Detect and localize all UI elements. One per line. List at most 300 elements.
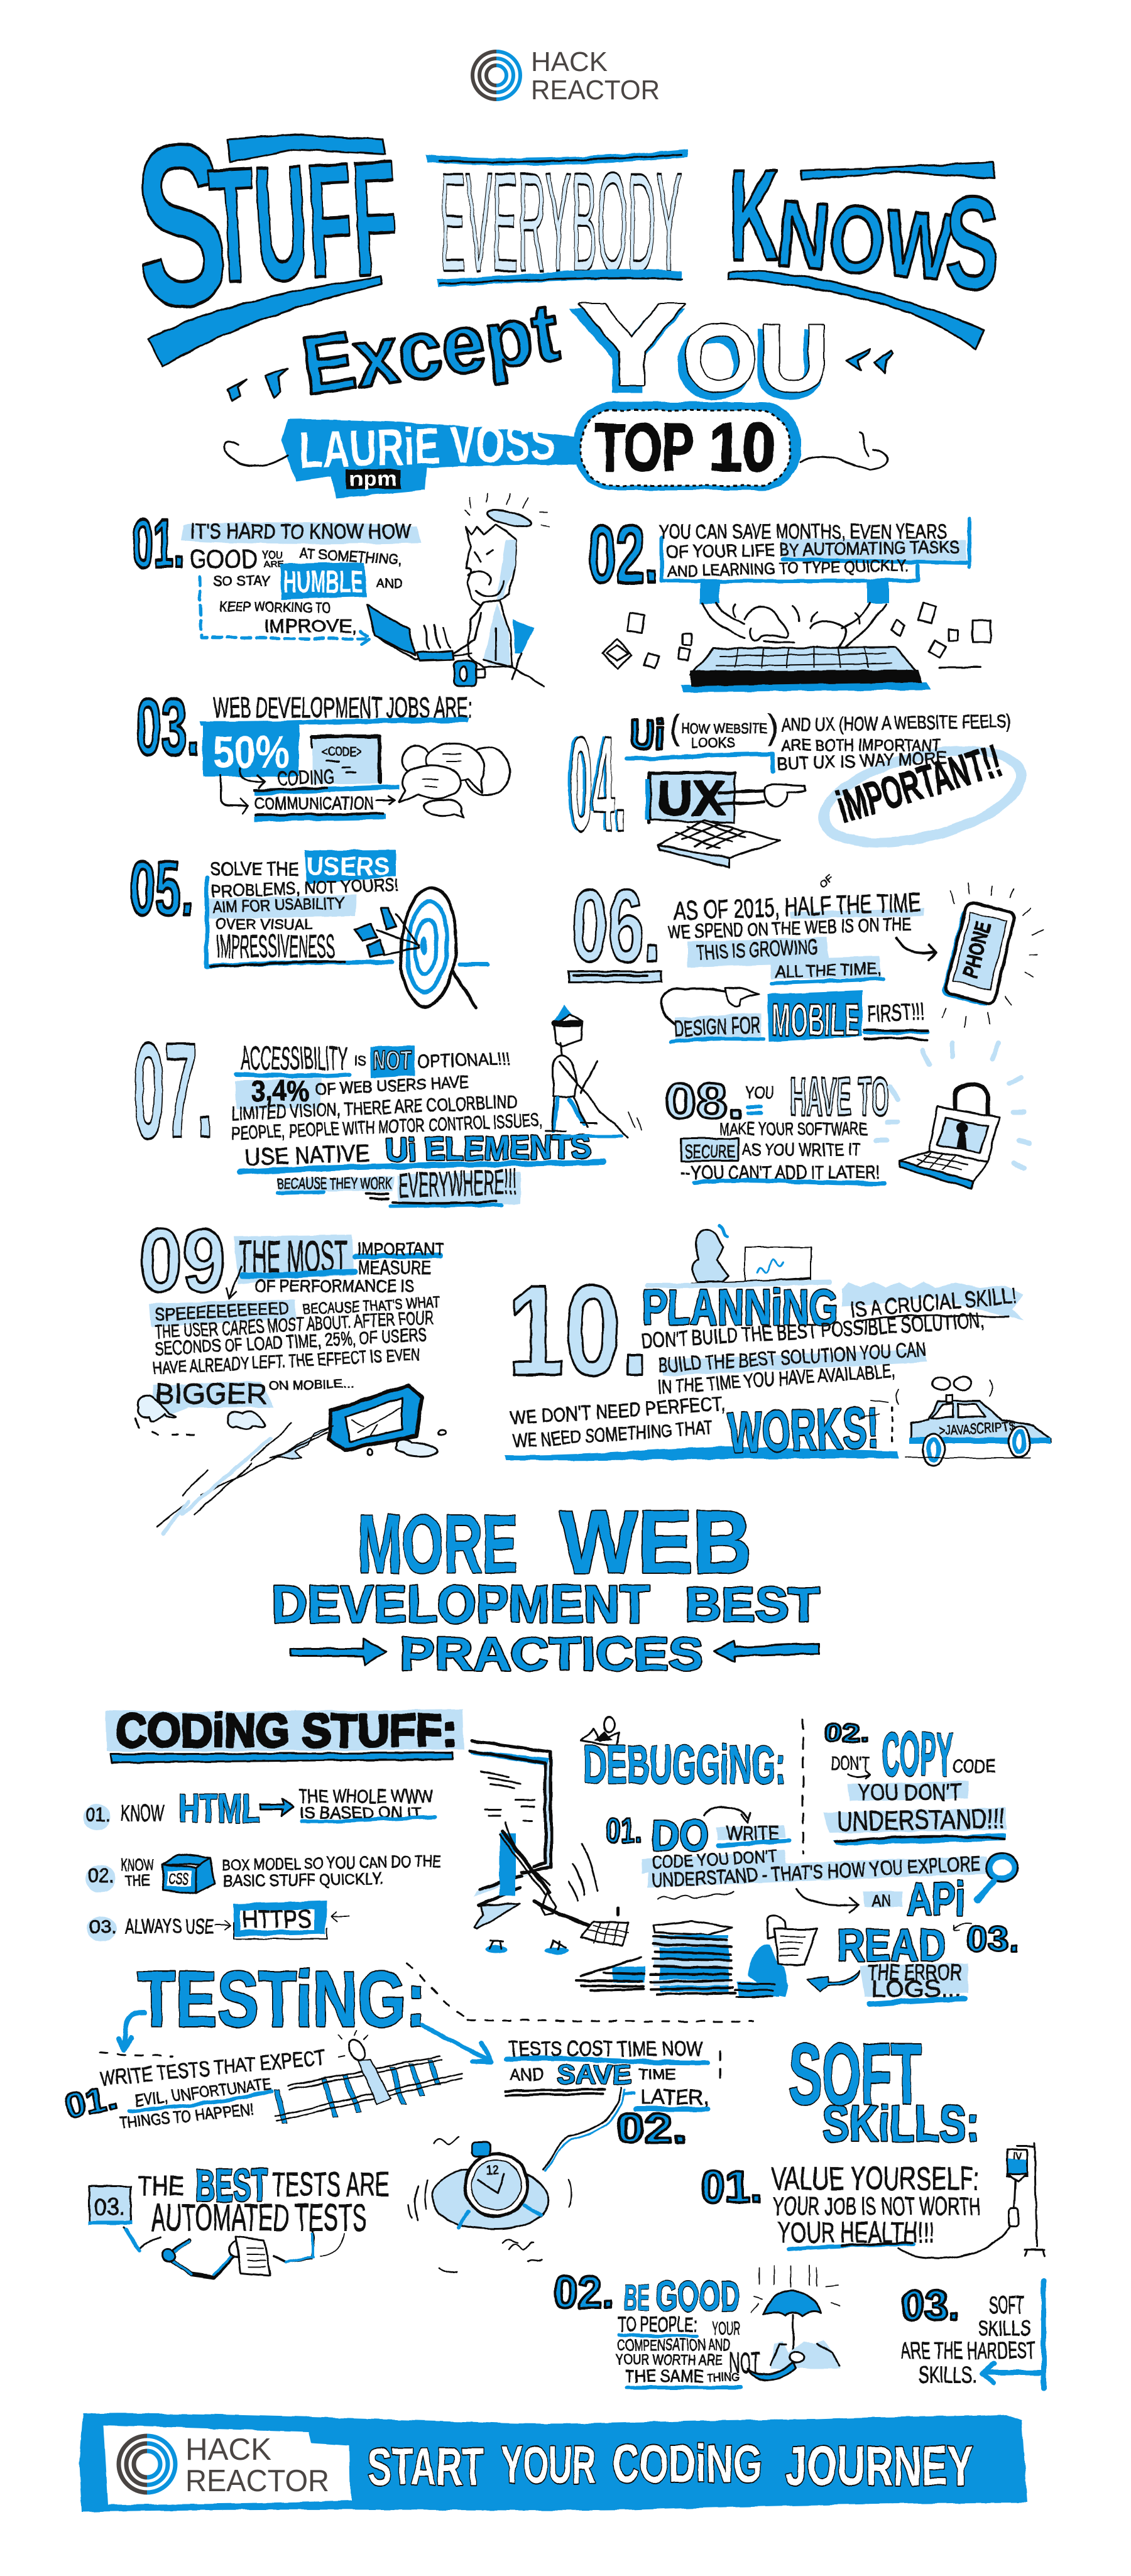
rule (236, 1074, 349, 1076)
skill 03: 03. (901, 2282, 960, 2328)
skill 02: THE SAME (625, 2366, 704, 2386)
text: because everywhere (277, 1161, 517, 1206)
icon: clouds (135, 1396, 445, 1456)
tip 02 don't copy: UNDERSTAND!!! (836, 1803, 1005, 1837)
tip 01 do write (606, 1807, 987, 1913)
item 03 https: ALWAYS USE (125, 1915, 214, 1938)
panel: testing (61, 1956, 754, 2278)
text: solve problems: AIM FOR USABILITY (212, 893, 345, 917)
text: half the time (667, 873, 921, 981)
icon: person tied on railway tracks (275, 2031, 462, 2124)
text: save months years: YOU CAN SAVE MONTHS, EVEN YEARS (658, 520, 947, 543)
arrow: down to tip 01 (118, 2012, 145, 2049)
panel: 09 speed (135, 1211, 445, 1533)
call to action text: JOURNEY (785, 2435, 973, 2497)
icon: stacks of error logs (577, 1921, 735, 1994)
text: you are at something: ARE (264, 559, 284, 570)
icon: broken monitor, swatter and bugs (468, 1741, 628, 1955)
blue rule (200, 718, 469, 726)
logo: Hack Reactor header: REACTOR (531, 75, 660, 106)
panel: 06 mobile first (569, 868, 1043, 1045)
secure box (681, 1138, 738, 1162)
explore an api (863, 1853, 1018, 1925)
heading: ui elements: Ui ELEMENTS (385, 1128, 591, 1169)
heading line 2: DEVELOPMENT (271, 1575, 650, 1634)
text: and ux (777, 711, 1011, 773)
text: user cares about: HAVE ALREADY LEFT. THE EFFECT IS EVEN (153, 1345, 421, 1378)
panel: coding stuff (83, 1705, 464, 1941)
text: how website looks: HOW WEBSITE (681, 721, 767, 736)
skill 02: YOUR WORTH ARE (616, 2352, 723, 2369)
highlight (234, 1235, 354, 1284)
heading: works: WORKS! (727, 1396, 880, 1465)
secure box: SECURE (685, 1142, 735, 1162)
icon: wind-up javascript car (861, 1377, 1051, 1466)
tip 01 text: EVIL, UNFORTUNATE (134, 2075, 272, 2110)
tip 01 text: THINGS TO HAPPEN! (118, 2100, 254, 2132)
tip 02 text: SAVE (557, 2060, 631, 2089)
dashed arrow to laptop (200, 577, 371, 645)
text: so stay and keep working: AND (376, 577, 402, 591)
labels: coding and communication: COMMUNICATION (254, 794, 374, 813)
tip 03 text: THE (138, 2171, 184, 2202)
icon: stopwatch on a lifebuoy: 12 (486, 2164, 499, 2176)
arrow: to tip 02 (423, 2026, 491, 2062)
panel: 03 web development jobs (136, 682, 510, 822)
labels: coding and communication: CODING (276, 765, 335, 790)
text: save months years (658, 520, 960, 581)
pointing hand (661, 988, 759, 1030)
tip 02 text: TESTS COST TIME NOW (508, 2037, 703, 2060)
text: best solution (510, 1309, 985, 1452)
item 01 know html: HTML (178, 1786, 260, 1831)
callout: important: iMPORTANT!! (831, 735, 1007, 832)
icon: bug on the heading (581, 1717, 619, 1747)
humble highlight box: HUMBLE (283, 564, 363, 599)
number 09: 09 (139, 1211, 226, 1311)
skill 02 (554, 2268, 760, 2388)
text: and ux: AND UX (HOW A WEBSITE FEELS) (782, 711, 1011, 736)
icon: target and arrow (355, 885, 476, 1008)
logo: Hack Reactor footer: HACK (185, 2433, 271, 2467)
text: best solution: WE DON'T NEED PERFECT, (510, 1392, 726, 1429)
logo panel (104, 2425, 351, 2504)
heading: you have to (745, 1067, 889, 1127)
tip 01 text: WRITE TESTS THAT EXPECT (99, 2046, 326, 2091)
tip 03 text: TESTS ARE (272, 2166, 389, 2203)
icon: stopwatch on a lifebuoy (408, 2087, 625, 2273)
text: half the time: OF (818, 873, 836, 890)
text: the most important: IMPORTANT (357, 1239, 444, 1258)
heading text: CODiNG STUFF: (116, 1705, 457, 1757)
logo: Hack Reactor footer: REACTOR (185, 2464, 329, 2498)
banner background (79, 2413, 1027, 2512)
number 10: 10. (508, 1258, 649, 1402)
text: so stay and keep working: IMPROVE, (264, 616, 357, 636)
text: half the time: AS OF 2015, HALF THE TIME (674, 887, 921, 925)
skill 02: TO PEOPLE: (618, 2313, 697, 2337)
section heading: more web development best practices (271, 1492, 819, 1680)
dashed dividers (101, 1963, 754, 2056)
text: solve problems: IMPRESSIVENESS (216, 929, 335, 965)
item 02 css box model: KNOW (121, 1855, 154, 1874)
heading rule (111, 1753, 452, 1762)
tip 03 read logs: 03. (966, 1919, 1019, 1960)
title word: YOU: Y (577, 280, 687, 410)
text: make your software secure: MAKE YOUR SOFTWARE (719, 1119, 867, 1138)
tip 01 do write: CODE YOU DON'T (651, 1847, 777, 1872)
highlights (235, 1078, 521, 1205)
tip 03 text: AUTOMATED TESTS (151, 2197, 367, 2239)
text: so stay and keep working: SO STAY (213, 573, 271, 589)
text: the most important: OF PERFORMANCE IS (254, 1276, 415, 1296)
panel: 07 accessibility: 07. (133, 1014, 213, 1166)
number underline (569, 971, 662, 982)
text: good: GOOD (189, 544, 258, 574)
arrow to phone (896, 937, 936, 959)
design for mobile first (671, 990, 927, 1045)
text: hard to know: IT'S HARD TO KNOW HOW (190, 520, 412, 543)
text: you are at something: YOU (262, 549, 283, 561)
text: you are at something (262, 545, 403, 570)
skill 01: YOUR JOB IS NOT WORTH (773, 2193, 981, 2220)
blue rule (240, 1162, 603, 1172)
text: you are at something: AT SOMETHING, (299, 545, 403, 569)
tip 02 text (506, 2037, 720, 2151)
tip 03 text (138, 2161, 389, 2239)
icon: umbrella over people (747, 2266, 841, 2380)
tip 02 text: TIME (638, 2066, 675, 2083)
tip 02 text: AND (510, 2065, 544, 2084)
skill 02: YOUR (712, 2318, 740, 2339)
text: make your software secure: AS YOU WRITE IT (742, 1140, 860, 1159)
tip 02 don't copy: CODE (953, 1756, 995, 1777)
icon: UX laptop: UX (657, 770, 725, 826)
stat 3.4%: 3,4% (251, 1074, 309, 1107)
arrow down to speed (226, 1267, 242, 1299)
panel: 08 security: HAVE TO (790, 1067, 889, 1127)
icon: tablet with rocket (157, 1385, 422, 1533)
number 05: 05. (129, 846, 194, 931)
title word: STUFF (130, 96, 402, 367)
tip 02 don't copy: YOU DON'T (858, 1779, 961, 1805)
text: the most important: THE MOST (239, 1232, 347, 1282)
title word: KNOWS (729, 143, 999, 349)
tip 02 text: 02. (616, 2105, 687, 2151)
icon: phone (941, 883, 1043, 1027)
title word: YOU (571, 280, 829, 418)
callout: important (808, 727, 1037, 866)
highlight strip (181, 522, 421, 544)
icon: flying keys (602, 603, 990, 669)
highlight and frame (662, 519, 970, 581)
tip 01 do write: DO (652, 1811, 709, 1860)
text: vision and motor control (231, 1072, 543, 1171)
tip 01 text: 01. (61, 2078, 121, 2126)
heading line 1: WEB (560, 1492, 752, 1592)
icon: phone: PHONE (959, 919, 996, 980)
heading (789, 2026, 980, 2153)
text: solve problems: PROBLEMS, NOT YOURS! (211, 875, 399, 901)
explore an api: AN (872, 1891, 891, 1910)
text: so stay and keep working (213, 573, 402, 636)
panel: soft skills (554, 2026, 1044, 2389)
panel: 07 accessibility: EVERYWHERE!!! (398, 1161, 517, 1205)
text: jobs title: WEB DEVELOPMENT JOBS ARE: (213, 691, 473, 724)
text: save months years: OF YOUR LIFE BY AUTOMATING TASKS (667, 537, 960, 562)
number 01: 01. (133, 505, 184, 581)
text: user cares about: THE USER CARES MOST ABOUT. AFTER FOUR (155, 1307, 434, 1343)
tip 01 do write: 01. (606, 1812, 643, 1850)
callout: crucial skill: IS A CRUCIAL SKILL! (849, 1282, 1017, 1323)
text: and ux: ARE BOTH IMPORTANT (782, 736, 941, 755)
item 03 https: HTTPS (243, 1906, 312, 1933)
icon: iv drip (898, 2143, 1044, 2258)
panel: soft skills: NOT (729, 2346, 760, 2379)
title block: TUFF (205, 126, 402, 317)
tip 02 don't copy: DON'T (831, 1753, 870, 1774)
users box: USERS (306, 851, 390, 881)
dash (748, 1107, 762, 1113)
panel: 07 accessibility (133, 1004, 641, 1206)
text: so stay and keep working: KEEP WORKING TO (219, 598, 331, 616)
item 02 css box model: BASIC STUFF QUICKLY. (223, 1869, 383, 1891)
text: user cares about: SECONDS OF LOAD TIME, 25%, OF USERS (155, 1324, 428, 1360)
tip 01 do write: UNDERSTAND - THAT'S HOW YOU EXPLORE (650, 1852, 981, 1892)
title word: YOU: Y (571, 286, 684, 416)
design for mobile first: MOBILE (772, 995, 860, 1045)
blue rule (627, 754, 773, 772)
text: accessibility is not optional: IS (354, 1052, 366, 1069)
skill 02: GOOD (656, 2273, 740, 2320)
icon: wind-up javascript car: >JAVASCRIPT$ (939, 1419, 1015, 1438)
heading highlight (106, 1709, 464, 1752)
tip 02 don't copy (824, 1718, 1007, 1845)
text: how website looks: ) (768, 707, 778, 746)
tip 03 text: BEST (195, 2161, 268, 2211)
icon: code screen: <CODE> (322, 746, 362, 759)
text: user cares about: BECAUSE THAT'S WHAT (302, 1294, 440, 1318)
logo: Hack Reactor header: HACK (531, 46, 608, 77)
panel: 02 automate and type (588, 508, 990, 692)
skill 01: YOUR HEALTH!!! (777, 2216, 934, 2249)
text: how website looks (670, 707, 778, 751)
title word: Except: Except (297, 285, 564, 412)
text: best solution: IN THE TIME YOU HAVE AVAILABLE, (657, 1361, 896, 1398)
bigger (152, 1377, 354, 1420)
icon: speech bubbles (399, 744, 510, 818)
heading: TESTiNG: (138, 1956, 427, 2043)
tip 03 box (88, 2186, 132, 2225)
item 02 css box model (85, 1852, 441, 1894)
skill 01 (701, 2161, 981, 2249)
item 01 know html: IS BASED ON IT... (300, 1803, 433, 1822)
logo: Hack Reactor footer (119, 2433, 329, 2498)
text: how website looks: ( (670, 707, 680, 746)
title word: YOU: OU (675, 311, 826, 418)
text: vision and motor control: USE NATIVE (244, 1140, 370, 1171)
text: and ux: BUT UX IS WAY MORE (777, 748, 947, 773)
item 01 know html (83, 1786, 435, 1831)
humble highlight box (280, 562, 367, 599)
heading line 3 with arrows: PRACTICES (400, 1628, 704, 1680)
item 02 css box model: BOX MODEL SO YOU CAN DO THE (222, 1852, 441, 1874)
title word: YOU: OU (682, 305, 829, 412)
text: vision and motor control: OF WEB USERS HAVE (315, 1072, 469, 1099)
heading: DEBUGGiNG: (584, 1735, 786, 1795)
item 03 https (87, 1901, 349, 1941)
dashed divider (802, 1720, 804, 1853)
title word: STUFF: S (130, 96, 233, 356)
skill 02: COMPENSATION AND (618, 2335, 731, 2354)
text: solve problems (210, 859, 399, 965)
blue frame and rule (207, 878, 487, 966)
tip 03 read logs (807, 1919, 1019, 2004)
design for mobile first: FIRST!!! (866, 998, 924, 1028)
skill 01: 01. (701, 2162, 763, 2212)
panel: 04 UI and UX: 04. (570, 708, 626, 860)
panel: 08 security (665, 1043, 1029, 1189)
panel: 10 planning (505, 1225, 1051, 1466)
panel: 01 stay humble (133, 493, 549, 686)
logo: Hack Reactor header (473, 46, 660, 106)
panel: debugging (577, 1717, 1019, 2004)
number 06: 06. (572, 868, 662, 983)
text: vision and motor control: PEOPLE, PEOPLE WITH MOTOR CONTROL ISSUES, (231, 1110, 543, 1144)
text: solve problems: OVER VISUAL (215, 916, 312, 933)
rule (695, 1181, 885, 1184)
labels: coding and communication (221, 765, 399, 822)
heading line 3 with arrows (290, 1628, 819, 1680)
item 01 know html: THE WHOLE WWW (298, 1786, 434, 1807)
tip 03 read logs: THE ERROR (868, 1961, 961, 1985)
speed highlight: SPEEEEEEEEEED (155, 1298, 290, 1324)
explore an api: APi (907, 1873, 965, 1925)
heading line 2: BEST (685, 1578, 819, 1632)
text: user cares about (153, 1294, 440, 1378)
number 04 (567, 707, 626, 860)
heading: planning: PLANNiNG (642, 1279, 838, 1335)
text: because everywhere: BECAUSE THEY WORK (277, 1175, 393, 1192)
tip 03 read logs: READ (837, 1921, 946, 1971)
icon: man reading logs (735, 1916, 817, 1997)
heading: you have to: YOU (745, 1083, 774, 1102)
skill 03 (901, 2281, 1044, 2389)
title word: KNOWS: S (946, 169, 999, 317)
icon: UX laptop (645, 770, 780, 867)
text: make your software secure (681, 1119, 880, 1183)
banner: Laurie Voss: LAURiE VOSS (298, 413, 556, 479)
item 01 know html: KNOW (121, 1800, 164, 1826)
50% block: 50% (213, 728, 290, 778)
heading: SOFT (789, 2026, 922, 2123)
text: accessibility is not optional: OPTIONAL!!! (417, 1049, 511, 1072)
panel: 05 solve users problems (129, 846, 487, 1008)
panel: 04 UI and UX (567, 707, 1037, 867)
footer banner (79, 2413, 1027, 2512)
text: vision and motor control: LIMITED VISION, THERE ARE COLORBLIND (231, 1091, 517, 1125)
swoosh (505, 1446, 899, 1460)
banner: Laurie Voss: npm (349, 467, 397, 490)
heading line 1: MORE (358, 1498, 518, 1590)
banner: Laurie Voss (224, 413, 887, 498)
bigger: ON MOBILE... (268, 1377, 354, 1394)
number 08: 08. (665, 1073, 743, 1128)
text: accessibility is not optional: NOT (373, 1045, 412, 1075)
item 02 css box model: 02. (88, 1864, 114, 1887)
item 01 know html: 01. (85, 1804, 111, 1825)
icon: hands typing on keyboard (681, 579, 980, 692)
highlights (687, 909, 924, 983)
skill 02: 02. (554, 2268, 614, 2318)
item 03 https: 03. (89, 1917, 117, 1938)
call to action text: YOUR (501, 2435, 596, 2494)
badge: TOP 10 (574, 402, 800, 490)
skill 02: THING (707, 2371, 740, 2384)
icon: padlock laptop (876, 1043, 1029, 1189)
call to action text: START (368, 2437, 484, 2496)
call to action text: CODiNG (613, 2434, 762, 2493)
text: make your software secure: --YOU CAN'T ADD IT LATER! (681, 1162, 880, 1183)
bigger: BIGGER (155, 1377, 267, 1410)
icon: iv drip: IV (1013, 2151, 1022, 2161)
tip 02 don't copy: COPY (882, 1720, 953, 1789)
item 02 css box model: CSS (168, 1871, 188, 1888)
skill 01: VALUE YOURSELF: (771, 2161, 980, 2197)
design for mobile first: DESIGN FOR (673, 1012, 761, 1042)
icon: developer with halo and laptop (367, 493, 549, 686)
skill 03: SOFT (989, 2291, 1024, 2319)
text: half the time: THIS IS GROWING (696, 935, 819, 965)
badge: TOP 10: 10 (709, 409, 775, 485)
tip 02 text: LATER, (640, 2085, 709, 2109)
call to action text (368, 2434, 973, 2497)
skill 03: SKILLS (978, 2317, 1030, 2340)
highlight (660, 1348, 927, 1376)
highlight (207, 895, 357, 919)
skill 03: SKILLS. (919, 2362, 976, 2388)
tip 01 do write: WRITE (726, 1821, 779, 1845)
tip 03 box: 03. (94, 2194, 126, 2220)
text: half the time: ALL THE TIME, (775, 959, 881, 981)
panel: 04 UI and UX: 04. (567, 707, 625, 859)
heading UI: Ui (630, 711, 665, 758)
tip 01 text (61, 2046, 326, 2132)
text: best solution: WE NEED SOMETHING THAT (513, 1417, 713, 1452)
text: save months years: AND LEARNING TO TYPE QUICKLY. (667, 555, 909, 581)
icon: person planning (647, 1225, 829, 1285)
heading: SKiLLS: (822, 2095, 980, 2153)
tip 03 read logs: LOGS... (871, 1976, 961, 2002)
text: how website looks: LOOKS (691, 735, 735, 751)
title word: KNOWS: NOW (773, 180, 958, 300)
heading line 1 (358, 1492, 752, 1592)
item 02 css box model: THE (125, 1872, 150, 1889)
skill 03: ARE THE HARDEST (901, 2338, 1035, 2364)
text: solve problems: SOLVE THE (210, 859, 299, 880)
text: half the time: WE SPEND ON THE WEB IS ON THE (667, 914, 912, 943)
tip 02 don't copy: 02. (824, 1718, 870, 1747)
title word: KNOWS: K (729, 143, 779, 287)
number 03: 03. (136, 682, 200, 772)
badge: TOP 10: TOP (595, 409, 694, 485)
number 02: 02. (588, 508, 658, 600)
text: best solution: DON'T BUILD THE BEST POSSIBLE SOLUTION, (641, 1309, 985, 1353)
title word: EVERYBODY (425, 144, 689, 301)
icon: code screen (312, 736, 380, 783)
icon: person with white cane (545, 1004, 641, 1137)
text: accessibility is not optional: ACCESSIBILITY (241, 1040, 347, 1077)
